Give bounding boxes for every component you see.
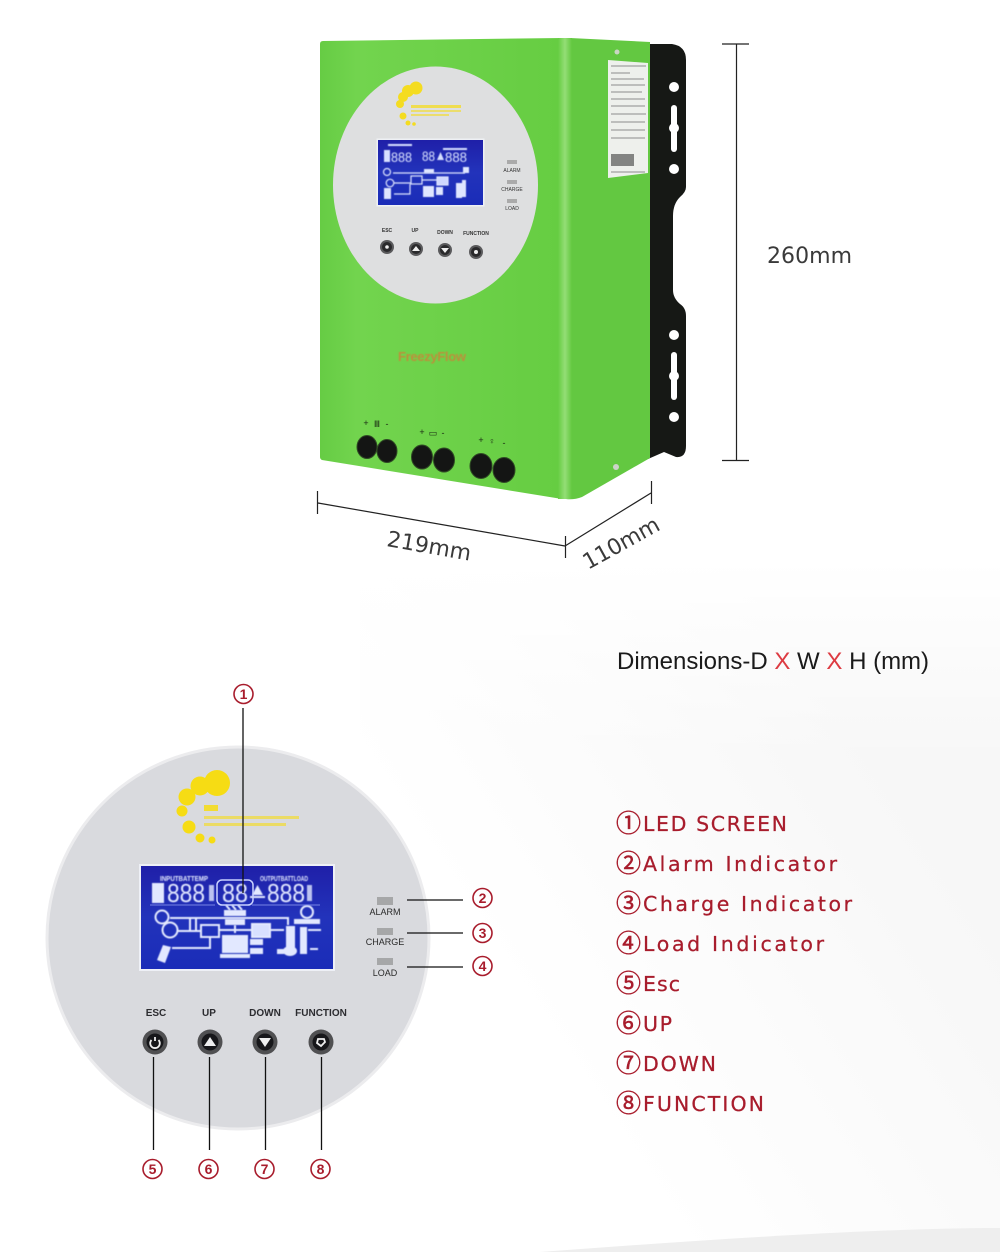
small indicators: LOAD bbox=[505, 206, 519, 212]
button labels: ESC bbox=[146, 1008, 166, 1019]
legend list: ① bbox=[616, 810, 641, 838]
side screws bbox=[613, 50, 620, 470]
button labels: UP bbox=[202, 1008, 216, 1019]
dimension: height 260mm bbox=[722, 44, 852, 460]
terminal symbols: + bbox=[478, 435, 484, 445]
front brand text: FreezyFlow bbox=[398, 349, 467, 364]
front-side edge highlight bbox=[558, 38, 572, 499]
button labels: DOWN bbox=[249, 1008, 281, 1019]
terminal symbols: - bbox=[502, 438, 506, 448]
legend list: ⑤ bbox=[616, 970, 641, 998]
small LCD screen: 88 bbox=[422, 148, 435, 164]
bracket mounting holes bbox=[669, 82, 679, 422]
large LCD screen: 888 bbox=[167, 878, 205, 908]
dimension: depth 110mm bbox=[565, 481, 664, 575]
large LCD screen bbox=[139, 864, 335, 971]
indicator lamps and labels: ALARM bbox=[369, 907, 401, 917]
page background wash bbox=[360, 560, 1000, 1252]
callout digits: 8 bbox=[317, 1161, 325, 1177]
small buttons: FUNCTION bbox=[463, 231, 489, 237]
indicator lamps and labels bbox=[366, 897, 404, 978]
legend list: ⑥ bbox=[616, 1010, 641, 1038]
terminal symbols: Ⅲ bbox=[374, 419, 380, 429]
green side face bbox=[566, 38, 650, 499]
small buttons: ESC bbox=[382, 228, 393, 234]
legend list: ④ bbox=[616, 930, 641, 958]
cable terminal ports bbox=[357, 436, 515, 482]
callout digits: 5 bbox=[149, 1161, 157, 1177]
round buttons bbox=[142, 1030, 334, 1054]
large LCD screen: 88 bbox=[222, 878, 248, 908]
legend list: ② bbox=[616, 850, 641, 878]
callout digits: 2 bbox=[479, 890, 487, 906]
enlarged control panel bbox=[47, 747, 429, 1129]
small indicators bbox=[501, 160, 523, 212]
small LCD screen: 888 bbox=[391, 149, 412, 165]
button labels bbox=[146, 1008, 347, 1019]
callout digits: 3 bbox=[479, 925, 487, 941]
terminal symbols: + bbox=[363, 418, 369, 428]
legend list: Load Indicator bbox=[643, 932, 825, 956]
legend list: ⑧ bbox=[616, 1090, 641, 1118]
callout digits: 7 bbox=[261, 1161, 269, 1177]
terminal symbols bbox=[363, 418, 506, 448]
callout digits bbox=[149, 686, 487, 1177]
terminal symbols: + bbox=[419, 427, 425, 437]
large LCD screen: 888 bbox=[267, 878, 305, 908]
indicator lamps and labels: CHARGE bbox=[366, 937, 404, 947]
small buttons bbox=[380, 228, 489, 259]
small LCD screen bbox=[376, 138, 484, 206]
callout digits: 6 bbox=[205, 1161, 213, 1177]
large LCD screen: INPUTBATTEMP bbox=[160, 876, 208, 883]
legend list: FUNCTION bbox=[643, 1092, 764, 1116]
legend list: UP bbox=[643, 1012, 672, 1036]
indicator lamps and labels: LOAD bbox=[373, 968, 398, 978]
legend list: DOWN bbox=[643, 1052, 716, 1076]
dimension: depth 110mm: 110mm bbox=[579, 513, 664, 575]
product photo: solar charge controller bbox=[320, 38, 686, 499]
panel logo bbox=[176, 770, 299, 844]
small buttons: DOWN bbox=[437, 230, 453, 236]
small LCD screen: 888 bbox=[445, 149, 467, 165]
terminal symbols: ▭ bbox=[429, 428, 437, 438]
large LCD screen: OUTPUTBATTLOAD bbox=[260, 876, 308, 883]
terminal symbols: - bbox=[386, 419, 388, 429]
callout digits: 1 bbox=[240, 686, 248, 702]
legend list bbox=[616, 810, 853, 1118]
dimension: width 219mm: 219mm bbox=[385, 527, 473, 567]
dimensions heading: Dimensions-D X W X H (mm) bbox=[617, 648, 929, 675]
small buttons: UP bbox=[412, 228, 419, 234]
green front face bbox=[320, 38, 562, 499]
leader lines bbox=[154, 708, 463, 1150]
button labels: FUNCTION bbox=[295, 1008, 347, 1019]
brand logo bbox=[396, 82, 461, 126]
panel disc bbox=[47, 747, 429, 1129]
terminal symbols: - bbox=[442, 428, 444, 438]
legend list: Alarm Indicator bbox=[643, 852, 838, 876]
legend list: ③ bbox=[616, 890, 641, 918]
callout numbers bbox=[143, 684, 492, 1178]
dimension: width 219mm bbox=[318, 491, 566, 567]
small indicators: CHARGE bbox=[501, 187, 523, 193]
legend list: LED SCREEN bbox=[643, 812, 787, 836]
legend list: ⑦ bbox=[616, 1050, 641, 1078]
legend list: Charge Indicator bbox=[643, 892, 853, 916]
front dial plate bbox=[333, 66, 538, 304]
small indicators: ALARM bbox=[503, 168, 521, 174]
callout digits: 4 bbox=[479, 958, 487, 974]
terminal symbols: ♀ bbox=[489, 436, 495, 446]
mounting bracket bbox=[648, 44, 686, 459]
legend list: Esc bbox=[643, 972, 680, 996]
side spec label bbox=[608, 60, 648, 178]
dimension: height 260mm: 260mm bbox=[767, 244, 852, 269]
